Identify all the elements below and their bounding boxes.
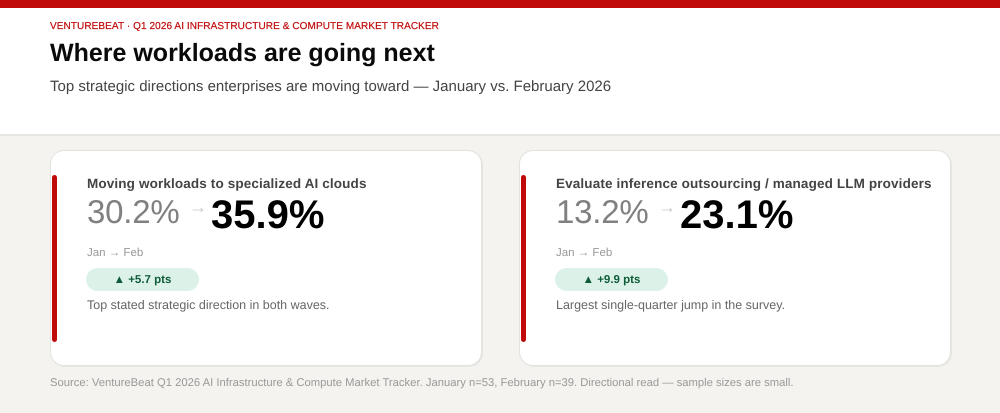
- change pill: [555, 268, 668, 291]
- change pill: ▲ +9.9 pts: [583, 274, 640, 286]
- eyebrow: VENTUREBEAT · Q1 2026 AI INFRASTRUCTURE & COMPUTE MARKET TRACKER: [50, 21, 439, 32]
- card: inference outsourcing: [519, 150, 951, 366]
- January value: 13.2%: [556, 193, 649, 230]
- note: Largest single-quarter jump in the survey.: [556, 298, 785, 312]
- February value: 23.1%: [680, 193, 793, 237]
- accent bar: [520, 175, 526, 342]
- source note: Source: VentureBeat Q1 2026 AI Infrastructure & Compute Market Tracker. January n=53, February n=39. Directional read — sample sizes are small.: [50, 377, 794, 389]
- January value: 30.2%: [87, 193, 180, 230]
- February value: 35.9%: [211, 193, 324, 237]
- subtitle: Top strategic directions enterprises are moving toward — January vs. February 2026: [50, 78, 611, 95]
- title: Where workloads are going next: [50, 39, 435, 67]
- note: Top stated strategic direction in both waves.: [87, 298, 330, 312]
- change pill: [86, 268, 199, 291]
- period label: Jan → Feb: [87, 246, 143, 258]
- arrow: →: [658, 197, 676, 217]
- card heading: Moving workloads to specialized AI clouds: [87, 176, 367, 191]
- header panel: [0, 0, 1000, 136]
- card heading: Evaluate inference outsourcing / managed LLM providers: [556, 176, 932, 191]
- change pill: ▲ +5.7 pts: [114, 274, 171, 286]
- card: specialized AI clouds: [50, 150, 482, 366]
- top red band: [0, 0, 1000, 8]
- arrow: →: [189, 197, 207, 217]
- period label: Jan → Feb: [556, 246, 612, 258]
- accent bar: [52, 175, 56, 342]
